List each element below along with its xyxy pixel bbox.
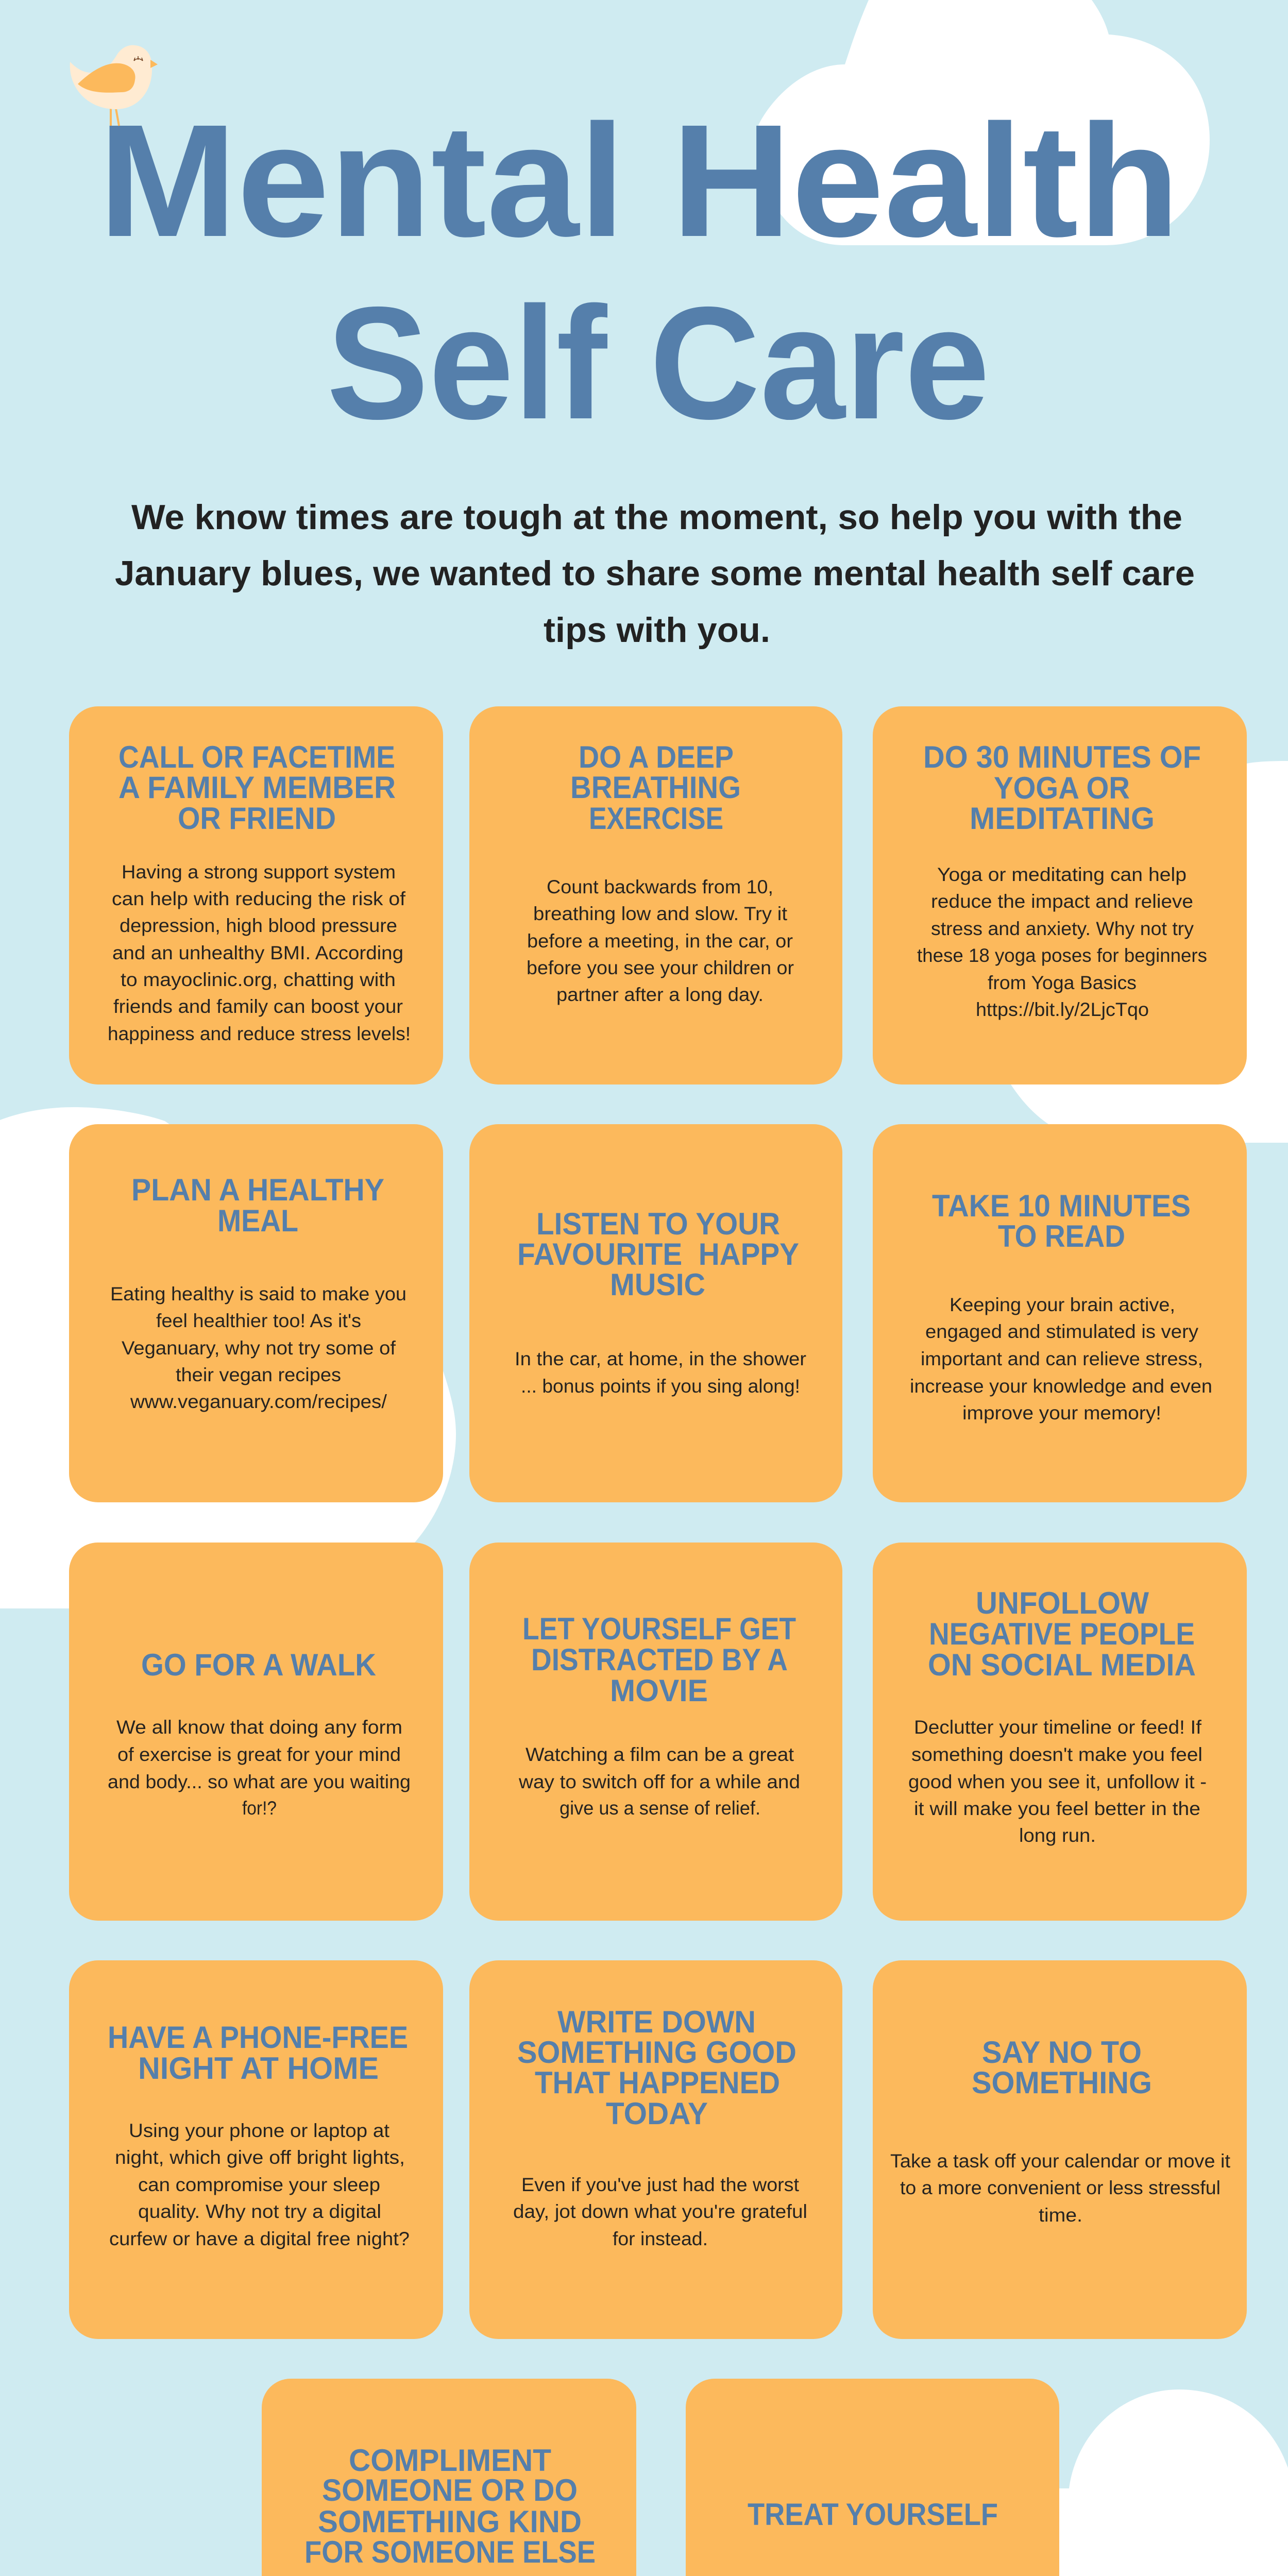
body: phone free: Using your phone or laptop at (129, 2120, 390, 2141)
heading: read: TO READ (998, 1219, 1125, 1253)
body: call or facetime: happiness and reduce stress levels! (108, 1023, 411, 1044)
heading: unfollow: NEGATIVE PEOPLE (929, 1617, 1195, 1651)
heading: happy music (517, 1207, 799, 1302)
body: read: improve your memory! (962, 1402, 1161, 1423)
heading: say no: SAY NO TO (982, 2035, 1142, 2070)
panel: read (873, 1124, 1247, 1502)
body: read: increase your knowledge and even (910, 1376, 1212, 1397)
body: healthy meal: Veganuary, why not try some of (122, 1337, 396, 1359)
body: read: important and can relieve stress, (921, 1348, 1203, 1369)
body: happy music: In the car, at home, in the shower (515, 1348, 806, 1369)
heading: unfollow: UNFOLLOW (976, 1586, 1149, 1620)
body: walk (108, 1717, 411, 1819)
body: unfollow: long run. (1019, 1825, 1096, 1846)
title: Self Care (327, 273, 990, 452)
heading: compliment (304, 2443, 596, 2569)
body: yoga: these 18 yoga poses for beginners (917, 945, 1207, 966)
heading: phone free: HAVE A PHONE-FREE (108, 2020, 408, 2055)
body: say no (890, 2150, 1231, 2226)
heading: write down: TODAY (606, 2096, 708, 2131)
heading: read: TAKE 10 MINUTES (932, 1189, 1191, 1223)
body: yoga: Yoga or meditating can help (937, 864, 1187, 885)
heading: compliment: FOR SOMEONE ELSE (304, 2535, 596, 2569)
cloud: top right (757, 0, 1210, 245)
cloud: bottom right (1030, 2389, 1288, 2576)
heading: write down: SOMETHING GOOD (517, 2035, 796, 2070)
body: yoga: from Yoga Basics (988, 972, 1137, 993)
body: write down: day, jot down what you're grateful (513, 2201, 807, 2222)
heading: movie: LET YOURSELF GET (522, 1612, 796, 1646)
heading: healthy meal: MEAL (217, 1204, 298, 1238)
panel: unfollow (873, 1543, 1247, 1921)
heading: unfollow (928, 1586, 1196, 1682)
body: movie: way to switch off for a while and (518, 1771, 800, 1792)
body: call or facetime: and an unhealthy BMI. According (112, 942, 403, 963)
body: walk: We all know that doing any form (116, 1717, 402, 1738)
body: movie: give us a sense of relief. (560, 1798, 760, 1819)
heading: phone free (108, 2020, 408, 2086)
heading: say no: SOMETHING (972, 2065, 1152, 2100)
panel: treat yourself (686, 2379, 1059, 2576)
heading: happy music: FAVOURITE HAPPY (517, 1237, 799, 1272)
panel: deep breathing (469, 706, 842, 1084)
heading: compliment: SOMETHING KIND (318, 2504, 582, 2539)
heading: read (932, 1189, 1191, 1253)
body: yoga: reduce the impact and relieve (931, 891, 1193, 912)
heading: happy music: LISTEN TO YOUR (536, 1207, 780, 1241)
body: deep breathing: partner after a long day. (556, 984, 764, 1005)
body: write down: Even if you've just had the worst (521, 2174, 800, 2195)
body: call or facetime: friends and family can boost your (113, 996, 403, 1017)
body: write down: for instead. (613, 2228, 708, 2249)
body: call or facetime: depression, high blood pressure (120, 915, 397, 936)
panel: say no (873, 1960, 1247, 2339)
body: call or facetime: Having a strong support system (122, 861, 396, 883)
intro paragraph: We know times are tough at the moment, so help you with the (131, 498, 1182, 537)
heading: movie: MOVIE (610, 1673, 708, 1708)
heading: call or facetime: OR FRIEND (178, 801, 336, 836)
heading: happy music: MUSIC (610, 1267, 705, 1302)
heading: deep breathing: BREATHING (570, 770, 741, 805)
body: deep breathing: before a meeting, in the car, or (527, 930, 793, 952)
body: deep breathing: Count backwards from 10, (547, 876, 773, 897)
body: movie (518, 1744, 800, 1819)
body: unfollow: it will make you feel better in the (914, 1798, 1200, 1819)
title (98, 91, 1180, 452)
panel: phone free (69, 1960, 443, 2339)
body: deep breathing: before you see your children or (527, 957, 794, 978)
heading: yoga (923, 740, 1201, 836)
body: happy music: ... bonus points if you sing along! (521, 1376, 800, 1397)
body: unfollow: Declutter your timeline or feed! If (914, 1717, 1202, 1738)
body: walk: of exercise is great for your mind (117, 1744, 401, 1765)
panel: write down (469, 1960, 842, 2339)
heading: phone free: NIGHT AT HOME (138, 2051, 379, 2086)
body: deep breathing (527, 876, 794, 1005)
body: read: engaged and stimulated is very (925, 1321, 1199, 1342)
heading: deep breathing (570, 740, 741, 836)
body: happy music (515, 1348, 806, 1397)
body: say no: time. (1039, 2205, 1082, 2226)
heading: yoga: YOGA OR (994, 771, 1130, 805)
heading: write down (517, 2005, 796, 2131)
heading: movie: DISTRACTED BY A (531, 1642, 788, 1677)
intro paragraph: January blues, we wanted to share some mental health self care (115, 554, 1195, 593)
panel: yoga (873, 706, 1247, 1084)
heading: compliment: SOMEONE OR DO (322, 2473, 578, 2507)
body: yoga: https://bit.ly/2LjcTqo (976, 999, 1149, 1020)
body: say no: to a more convenient or less stressful (900, 2177, 1221, 2198)
body: walk: and body... so what are you waiting (108, 1771, 411, 1792)
body: call or facetime (108, 861, 411, 1044)
body: call or facetime: to mayoclinic.org, chatting with (121, 969, 396, 990)
body: healthy meal: feel healthier too! As it's (156, 1310, 361, 1331)
heading: call or facetime: CALL OR FACETIME (118, 740, 395, 774)
icon: bird on title (70, 45, 158, 126)
heading: compliment: COMPLIMENT (349, 2443, 551, 2478)
body: movie: Watching a film can be a great (526, 1744, 794, 1765)
body: read (910, 1294, 1212, 1423)
panel: walk (69, 1543, 443, 1921)
heading: walk: GO FOR A WALK (141, 1648, 376, 1682)
body: unfollow: something doesn't make you feel (911, 1744, 1202, 1765)
body: deep breathing: breathing low and slow. Try it (533, 903, 788, 924)
body: healthy meal: Eating healthy is said to make you (110, 1283, 406, 1304)
body: say no: Take a task off your calendar or move it (890, 2150, 1231, 2172)
heading: healthy meal: PLAN A HEALTHY (131, 1173, 384, 1207)
body: phone free: can compromise your sleep (138, 2174, 380, 2195)
heading: movie (522, 1612, 796, 1708)
cloud: middle left (0, 1107, 456, 1608)
body: healthy meal (110, 1283, 406, 1412)
body: call or facetime: can help with reducing the risk of (112, 888, 406, 909)
panel: call or facetime (69, 706, 443, 1084)
body: yoga: stress and anxiety. Why not try (931, 918, 1194, 939)
body: phone free: quality. Why not try a digital (138, 2201, 381, 2222)
heading: yoga: DO 30 MINUTES OF (923, 740, 1201, 774)
heading: call or facetime (118, 740, 396, 836)
heading: treat yourself: TREAT YOURSELF (748, 2497, 998, 2532)
heading: deep breathing: DO A DEEP (579, 740, 734, 774)
intro paragraph (115, 498, 1195, 650)
body: healthy meal: www.veganuary.com/recipes/ (130, 1391, 387, 1412)
heading: write down: THAT HAPPENED (535, 2065, 780, 2100)
body: healthy meal: their vegan recipes (176, 1364, 341, 1385)
body: yoga (917, 864, 1207, 1020)
body: phone free: night, which give off bright lights, (115, 2147, 405, 2168)
heading: write down: WRITE DOWN (557, 2005, 756, 2039)
cloud: middle right (1002, 761, 1288, 1143)
heading: call or facetime: A FAMILY MEMBER (118, 770, 396, 805)
panel: compliment (262, 2379, 636, 2576)
panel: healthy meal (69, 1124, 443, 1502)
heading: unfollow: ON SOCIAL MEDIA (928, 1648, 1196, 1682)
intro paragraph: tips with you. (544, 611, 770, 650)
body: walk: for!? (242, 1798, 277, 1819)
body: phone free (109, 2120, 410, 2249)
body: unfollow (908, 1717, 1207, 1846)
panel: happy music (469, 1124, 842, 1502)
panel: movie (469, 1543, 842, 1921)
heading: say no (972, 2035, 1152, 2100)
body: unfollow: good when you see it, unfollow it - (908, 1771, 1207, 1792)
title: Mental Health (98, 91, 1180, 270)
heading: deep breathing: EXERCISE (589, 801, 723, 836)
heading: healthy meal (131, 1173, 384, 1238)
heading: yoga: MEDITATING (970, 801, 1155, 836)
body: phone free: curfew or have a digital free night? (109, 2228, 410, 2249)
body: write down (513, 2174, 807, 2249)
body: read: Keeping your brain active, (950, 1294, 1175, 1315)
